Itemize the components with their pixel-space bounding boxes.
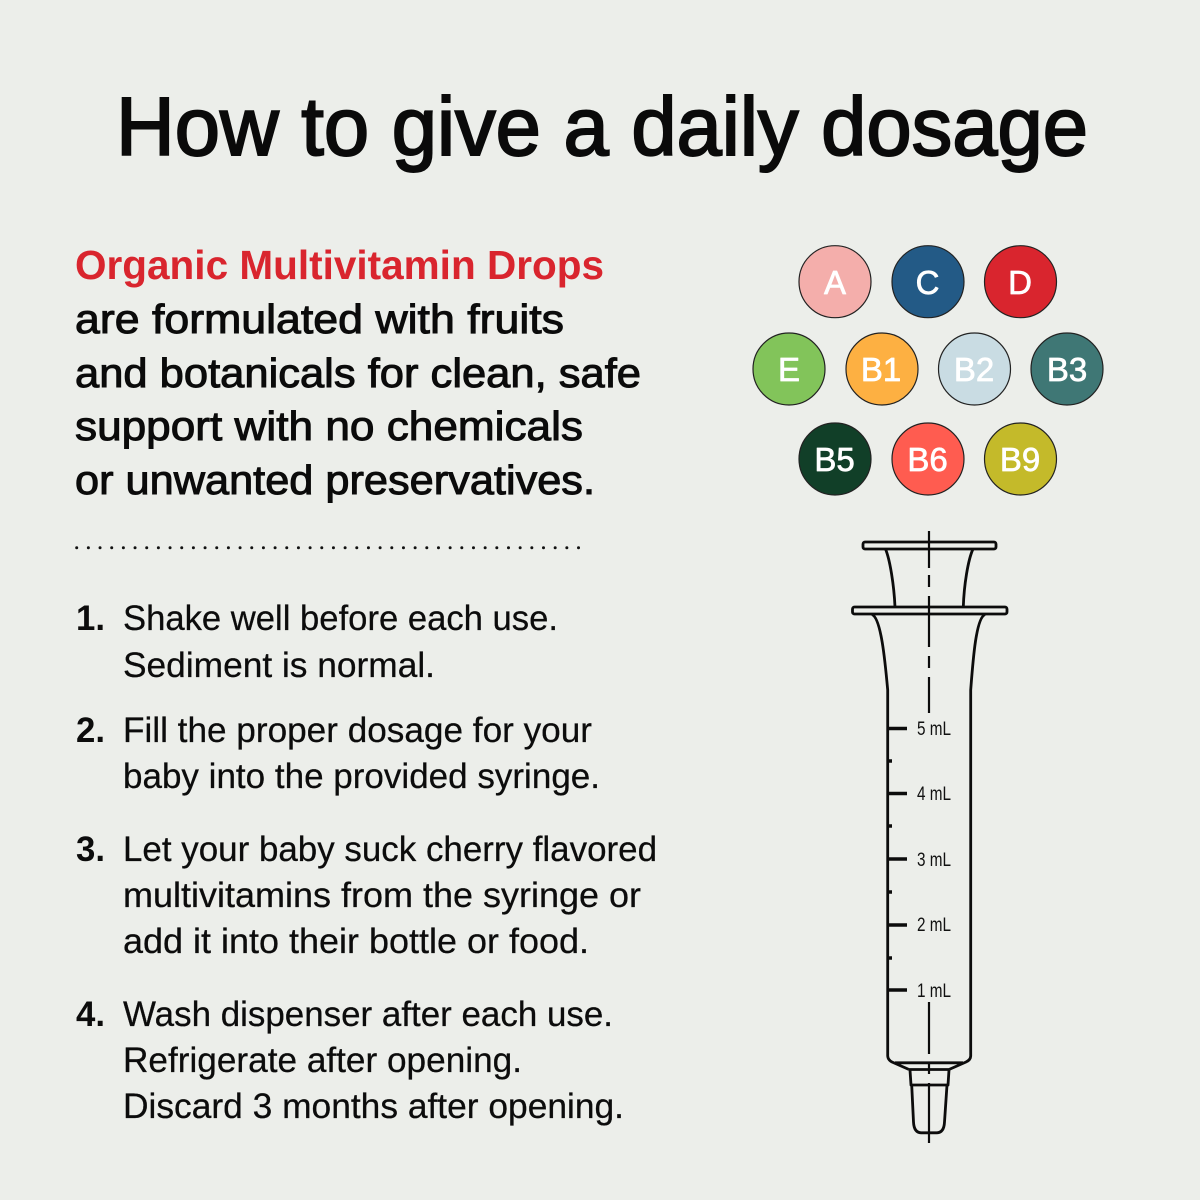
scale labels: 1 mL — [917, 981, 951, 1002]
step 4: Refrigerate after opening. — [123, 1041, 522, 1080]
step 2: baby into the provided syringe. — [123, 757, 600, 796]
product name highlight: Organic Multivitamin Drops — [75, 242, 604, 288]
intro paragraph: or unwanted preservatives. — [75, 457, 595, 503]
vitamin C: C — [916, 264, 939, 301]
step 1: Shake well before each use. — [123, 599, 558, 638]
scale labels: 2 mL — [917, 915, 951, 936]
vitamin D — [984, 246, 1056, 318]
syringe — [852, 531, 1007, 1143]
vitamin B5 — [799, 423, 871, 495]
title: How to give a daily dosage — [116, 80, 1088, 173]
step 1 — [76, 599, 558, 685]
vitamin B9 — [984, 423, 1056, 495]
syringe tip — [910, 1070, 949, 1133]
vitamin B3: B3 — [1047, 351, 1087, 388]
vitamin B1: B1 — [861, 351, 901, 388]
vitamin E: E — [778, 351, 800, 388]
step 2: Fill the proper dosage for your — [123, 711, 592, 750]
step 3: multivitamins from the syringe or — [123, 876, 641, 915]
scale labels: 3 mL — [917, 850, 951, 871]
intro paragraph — [75, 242, 641, 503]
scale labels — [917, 719, 951, 1002]
step 3: Let your baby suck cherry flavored — [123, 830, 657, 869]
vitamin B1 — [846, 333, 918, 405]
vitamin E — [753, 333, 825, 405]
intro paragraph: are formulated with fruits — [75, 296, 564, 342]
step 3: 3. — [76, 830, 105, 869]
scale ticks — [888, 728, 907, 990]
step 4 — [76, 995, 624, 1126]
vitamin B6 — [892, 423, 964, 495]
barrel flange — [852, 607, 1007, 614]
step 1: 1. — [76, 599, 105, 638]
step 3 — [76, 830, 657, 961]
scale labels: 4 mL — [917, 784, 951, 805]
vitamin A: A — [824, 264, 846, 301]
step 3: add it into their bottle or food. — [123, 922, 589, 961]
scale labels: 5 mL — [917, 719, 951, 740]
intro paragraph: and botanicals for clean, safe — [75, 350, 641, 396]
barrel — [872, 614, 985, 1070]
step 1: Sediment is normal. — [123, 646, 435, 685]
step 4: 4. — [76, 995, 105, 1034]
step 4: Discard 3 months after opening. — [123, 1087, 624, 1126]
step 4: Wash dispenser after each use. — [123, 995, 613, 1034]
vitamin B2: B2 — [954, 351, 994, 388]
vitamin B3 — [1031, 333, 1103, 405]
step 2: 2. — [76, 711, 105, 750]
vitamin B2 — [938, 333, 1010, 405]
step 2 — [76, 711, 600, 796]
vitamin circles — [753, 246, 1103, 495]
vitamin C — [892, 246, 964, 318]
centre line — [928, 531, 930, 1143]
intro paragraph: support with no chemicals — [75, 403, 583, 449]
vitamin A — [799, 246, 871, 318]
plunger flange — [863, 542, 996, 549]
vitamin B9: B9 — [1000, 441, 1040, 478]
vitamin B5: B5 — [814, 441, 855, 478]
vitamin D: D — [1008, 264, 1032, 301]
vitamin B6: B6 — [907, 441, 948, 478]
